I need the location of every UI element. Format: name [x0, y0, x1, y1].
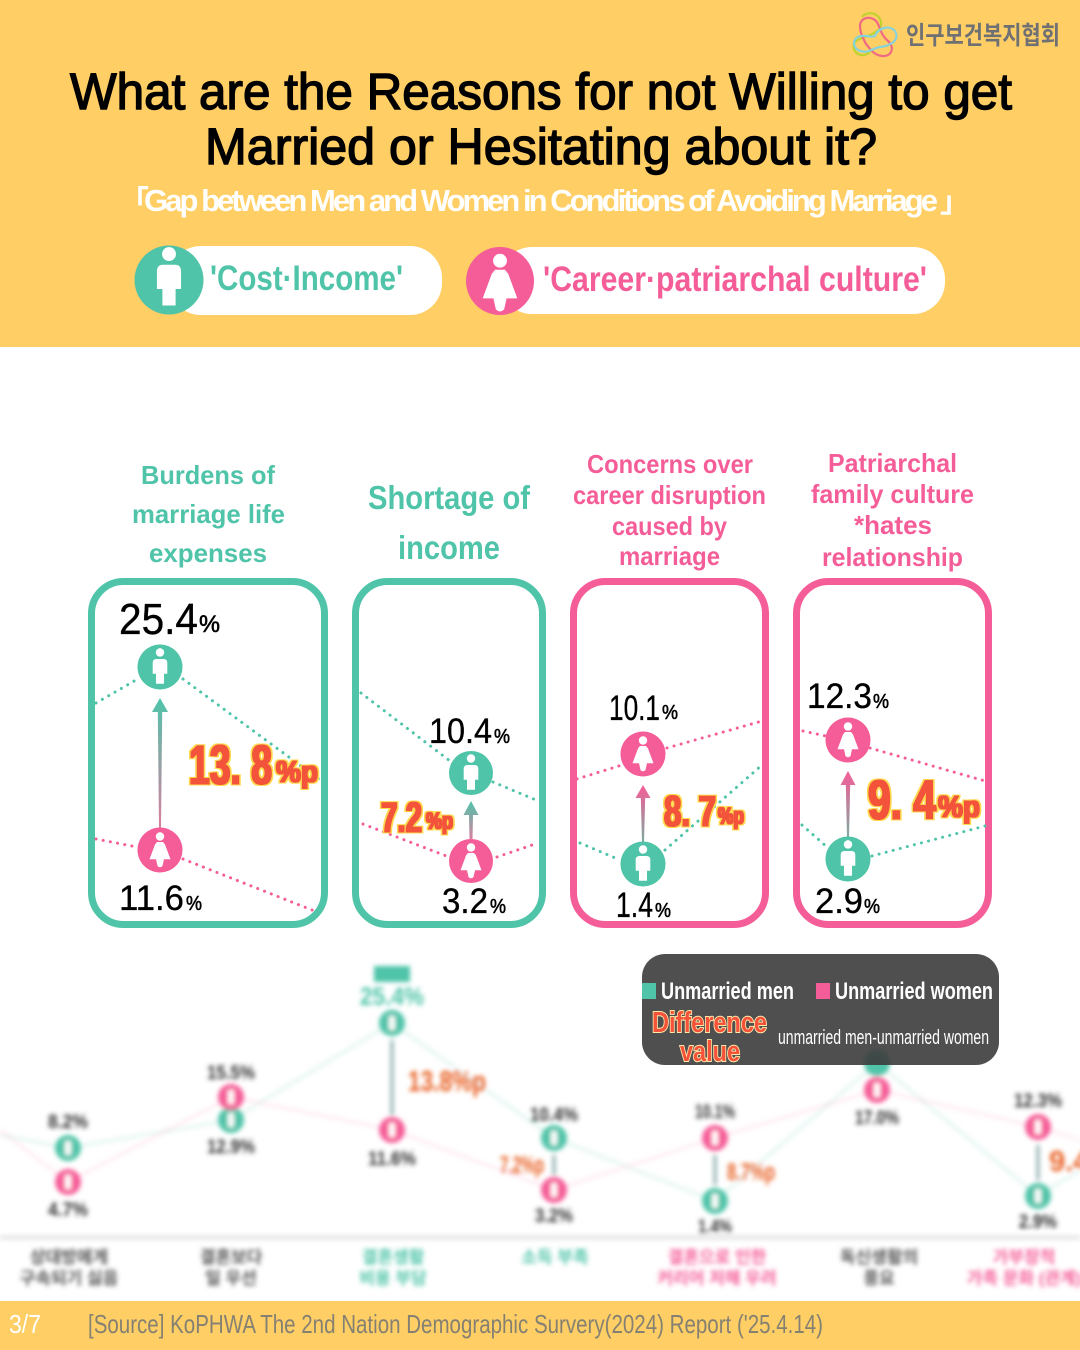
blurred background chart: 상대방에게	[30, 1248, 108, 1267]
value: women 10.1%: %	[662, 702, 678, 724]
blurred background chart: 결혼생활	[362, 1248, 425, 1267]
panel: shortage of income	[356, 582, 542, 924]
heading: patriarchal family culture: *hates	[854, 510, 932, 540]
blurred background chart: 7.2%p	[500, 1152, 544, 1179]
title: What are the Reasons for not Willing to get	[70, 63, 1012, 120]
blurred background chart: 가부장적	[993, 1248, 1055, 1267]
heading: shortage of income: income	[398, 529, 500, 566]
subtitle: 」	[940, 186, 970, 219]
heading: shortage of income	[368, 479, 531, 566]
heading: burdens of marriage life expenses: marriage life	[132, 499, 285, 529]
difference 9.4%p: 9. 4	[868, 768, 936, 831]
label: difference value: Difference	[652, 1007, 767, 1039]
blurred background chart: 비용 부담	[359, 1269, 427, 1288]
subtitle: 「	[119, 186, 149, 219]
label: unmarried women: Unmarried women	[835, 978, 993, 1005]
blurred background chart: 풍요	[863, 1269, 895, 1288]
blurred background chart: 4.7%	[48, 1200, 88, 1221]
value: men 25.4%: 25.4	[119, 595, 198, 644]
heading: concerns over career disruption: caused by	[612, 511, 727, 541]
value: women 11.6%: 11.6	[119, 879, 184, 918]
value: men 1.4%: 1.4	[616, 886, 653, 925]
arrow: gap	[840, 771, 856, 837]
label: unmarried men: Unmarried men	[661, 978, 794, 1005]
value: women 3.2%: 3.2	[442, 882, 488, 921]
blurred background chart: 15.5%	[207, 1063, 255, 1084]
value: women 12.3%: 12.3	[807, 677, 872, 716]
label: formula: unmarried men-unmarried women	[778, 1027, 989, 1049]
swatch: unmarried men	[642, 983, 656, 999]
difference 13.8%p: %p	[276, 754, 318, 789]
heading: concerns over career disruption: career disruption	[573, 480, 766, 510]
header band	[0, 0, 1080, 347]
value: women 12.3%: %	[873, 691, 889, 713]
blurred background chart: 3.2%	[535, 1206, 573, 1227]
blurred background chart: 13.8%p	[408, 1066, 486, 1098]
label: difference value	[652, 1007, 767, 1068]
icon: unmarried women	[826, 718, 870, 762]
blurred background chart: 2.9%	[1019, 1212, 1057, 1233]
label: difference value: value	[680, 1036, 740, 1068]
icon: unmarried men	[449, 751, 493, 795]
pill: cost income: 'Cost·Income'	[210, 259, 403, 298]
heading: patriarchal family culture: relationship	[822, 542, 963, 572]
icon: unmarried women	[620, 732, 666, 776]
blurred background chart: 커리어 저해 우려	[658, 1269, 776, 1288]
value: men 10.4%: 10.4	[429, 712, 492, 751]
blurred background chart: 독신생활의	[840, 1248, 918, 1267]
blurred background chart: 10.1%	[695, 1102, 735, 1123]
blurred background chart: 1.4%	[698, 1217, 732, 1238]
value: men 2.9%: 2.9	[815, 882, 863, 921]
blurred background chart: 12.9%	[207, 1137, 255, 1158]
title: Married or Hesitating about it?	[205, 118, 877, 175]
blurred background chart: 12.3%	[1014, 1091, 1062, 1112]
heading: patriarchal family culture: Patriarchal	[828, 448, 957, 478]
footer band	[0, 1301, 1080, 1350]
panel: patriarchal family culture	[796, 582, 988, 924]
heading: patriarchal family culture: family culture	[811, 479, 974, 509]
blurred background chart: 17.0%	[855, 1108, 899, 1129]
difference 13.8%p: 13. 8	[189, 733, 272, 796]
value: women 11.6%: %	[186, 893, 202, 915]
source: [Source] KoPHWA The 2nd Nation Demographic Survery(2024) Report ('25.4.14)	[88, 1309, 823, 1339]
value: women 3.2%: %	[490, 896, 506, 918]
value: men 1.4%: %	[655, 900, 671, 922]
icon: unmarried men	[138, 644, 182, 690]
panel: burdens of marriage life expenses	[92, 582, 324, 924]
value: men 10.4%: %	[494, 726, 510, 748]
heading: burdens of marriage life expenses: Burdens of	[141, 460, 275, 490]
arrow: gap	[152, 698, 168, 828]
heading: burdens of marriage life expenses	[132, 460, 285, 568]
difference 8.7%p: %p	[718, 803, 744, 830]
blurred background chart	[0, 966, 1080, 1288]
value: men 25.4%: %	[199, 611, 220, 638]
pill: cost income	[134, 246, 442, 315]
difference 8.7%p: 8. 7	[664, 787, 716, 836]
blurred background chart: 10.4%	[530, 1105, 578, 1126]
difference 9.4%p: %p	[938, 789, 980, 824]
arrow: gap	[636, 785, 650, 842]
heading: concerns over career disruption	[573, 449, 766, 571]
heading: burdens of marriage life expenses: expenses	[149, 538, 267, 568]
blurred background chart: 25.4%	[360, 983, 424, 1011]
blurred background chart: 소득 부족	[521, 1248, 589, 1267]
heading: patriarchal family culture	[811, 448, 974, 572]
value: men 2.9%: %	[864, 896, 880, 918]
heading: concerns over career disruption: marriage	[619, 541, 720, 571]
blurred background chart: 결혼보다	[200, 1248, 263, 1267]
pill: career patriarchal culture: 'Career·patriarchal culture'	[543, 260, 927, 299]
subtitle: Gap between Men and Women in Conditions of Avoiding Marriage	[144, 183, 938, 218]
blurred background chart: 8.7%p	[727, 1159, 775, 1186]
heading: concerns over career disruption: Concerns over	[587, 449, 753, 479]
difference 7.2%p: 7.2	[381, 794, 422, 842]
icon: unmarried women	[449, 839, 493, 883]
icon: unmarried women	[138, 828, 182, 872]
icon: unmarried men	[826, 836, 870, 882]
difference 7.2%p: %p	[426, 808, 453, 835]
blurred background chart: 일 우선	[205, 1269, 257, 1288]
blurred background chart: 11.6%	[368, 1149, 416, 1170]
page number: 3/7	[9, 1309, 41, 1339]
blurred background chart: 8.2%	[48, 1112, 88, 1133]
blurred background chart: 결혼으로 인한	[668, 1248, 767, 1267]
legend	[642, 954, 999, 1068]
heading: shortage of income: Shortage of	[368, 479, 531, 516]
swatch: unmarried women	[816, 983, 830, 999]
blurred background chart: 구속되기 싫음	[20, 1269, 118, 1288]
value: women 10.1%: 10.1	[609, 689, 660, 728]
arrow: gap	[464, 801, 478, 839]
icon: unmarried men	[620, 842, 666, 886]
pill: career patriarchal culture	[466, 247, 945, 315]
title	[70, 63, 1012, 175]
panel: concerns over career disruption	[574, 582, 766, 925]
logo: KoPHWA	[853, 13, 1060, 56]
blurred background chart: 가족 문화 (관계)	[967, 1269, 1080, 1288]
